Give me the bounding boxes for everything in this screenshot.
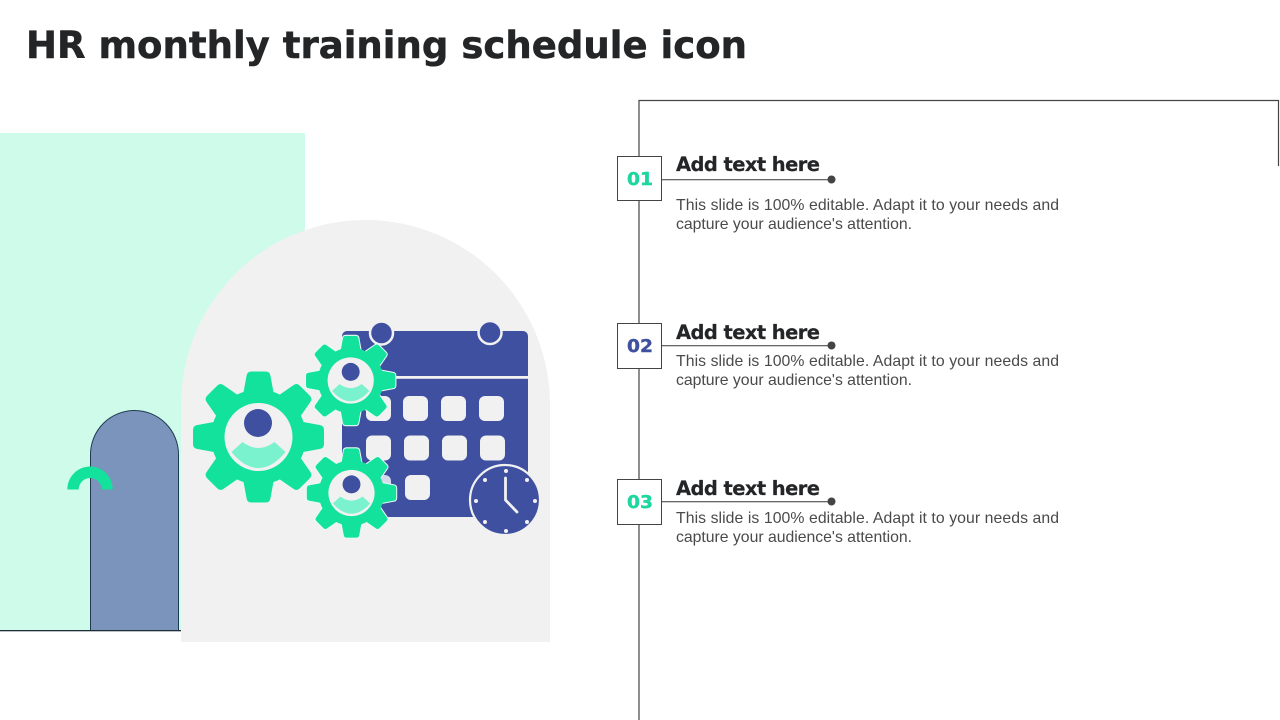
body text 03: This slide is 100% editable. Adapt it to your needs and — [676, 510, 1059, 527]
body text 01: capture your audience's attention. — [676, 216, 912, 233]
heading 02: Add text here — [676, 321, 820, 344]
body text 02 — [676, 353, 1059, 389]
connector 02 — [662, 342, 836, 350]
item 01 — [618, 153, 1059, 233]
body text 01: This slide is 100% editable. Adapt it to your needs and — [676, 197, 1059, 214]
panel: grey arch — [181, 220, 550, 642]
item 02 — [618, 321, 1059, 389]
icon: green arc — [67, 467, 113, 490]
baseline — [0, 630, 181, 631]
title: HR monthly training schedule icon — [26, 24, 747, 67]
heading 01: Add text here — [676, 153, 820, 176]
icon: calendar — [342, 321, 528, 517]
connector 03 — [662, 498, 836, 506]
icon: large gear — [193, 372, 324, 502]
number box 03 — [618, 480, 662, 524]
panel: mint background — [0, 133, 305, 631]
number box 01: 01 — [627, 170, 653, 190]
body text 03 — [676, 510, 1059, 546]
item 03 — [618, 477, 1059, 546]
body text 02: This slide is 100% editable. Adapt it to your needs and — [676, 353, 1059, 370]
number box 03: 03 — [627, 493, 653, 513]
body text 01 — [676, 197, 1059, 233]
icon: clock — [470, 465, 540, 535]
shape: blue arch — [90, 411, 178, 630]
body text 02: capture your audience's attention. — [676, 372, 912, 389]
body text 03: capture your audience's attention. — [676, 529, 912, 546]
number box 02 — [618, 324, 662, 368]
timeline frame — [639, 100, 1278, 720]
heading 03: Add text here — [676, 477, 820, 500]
connector 01 — [662, 176, 836, 184]
icon: lower small gear — [306, 448, 397, 538]
icon: upper small gear — [306, 335, 396, 426]
number box 01 — [618, 156, 662, 200]
number box 02: 02 — [627, 337, 653, 357]
